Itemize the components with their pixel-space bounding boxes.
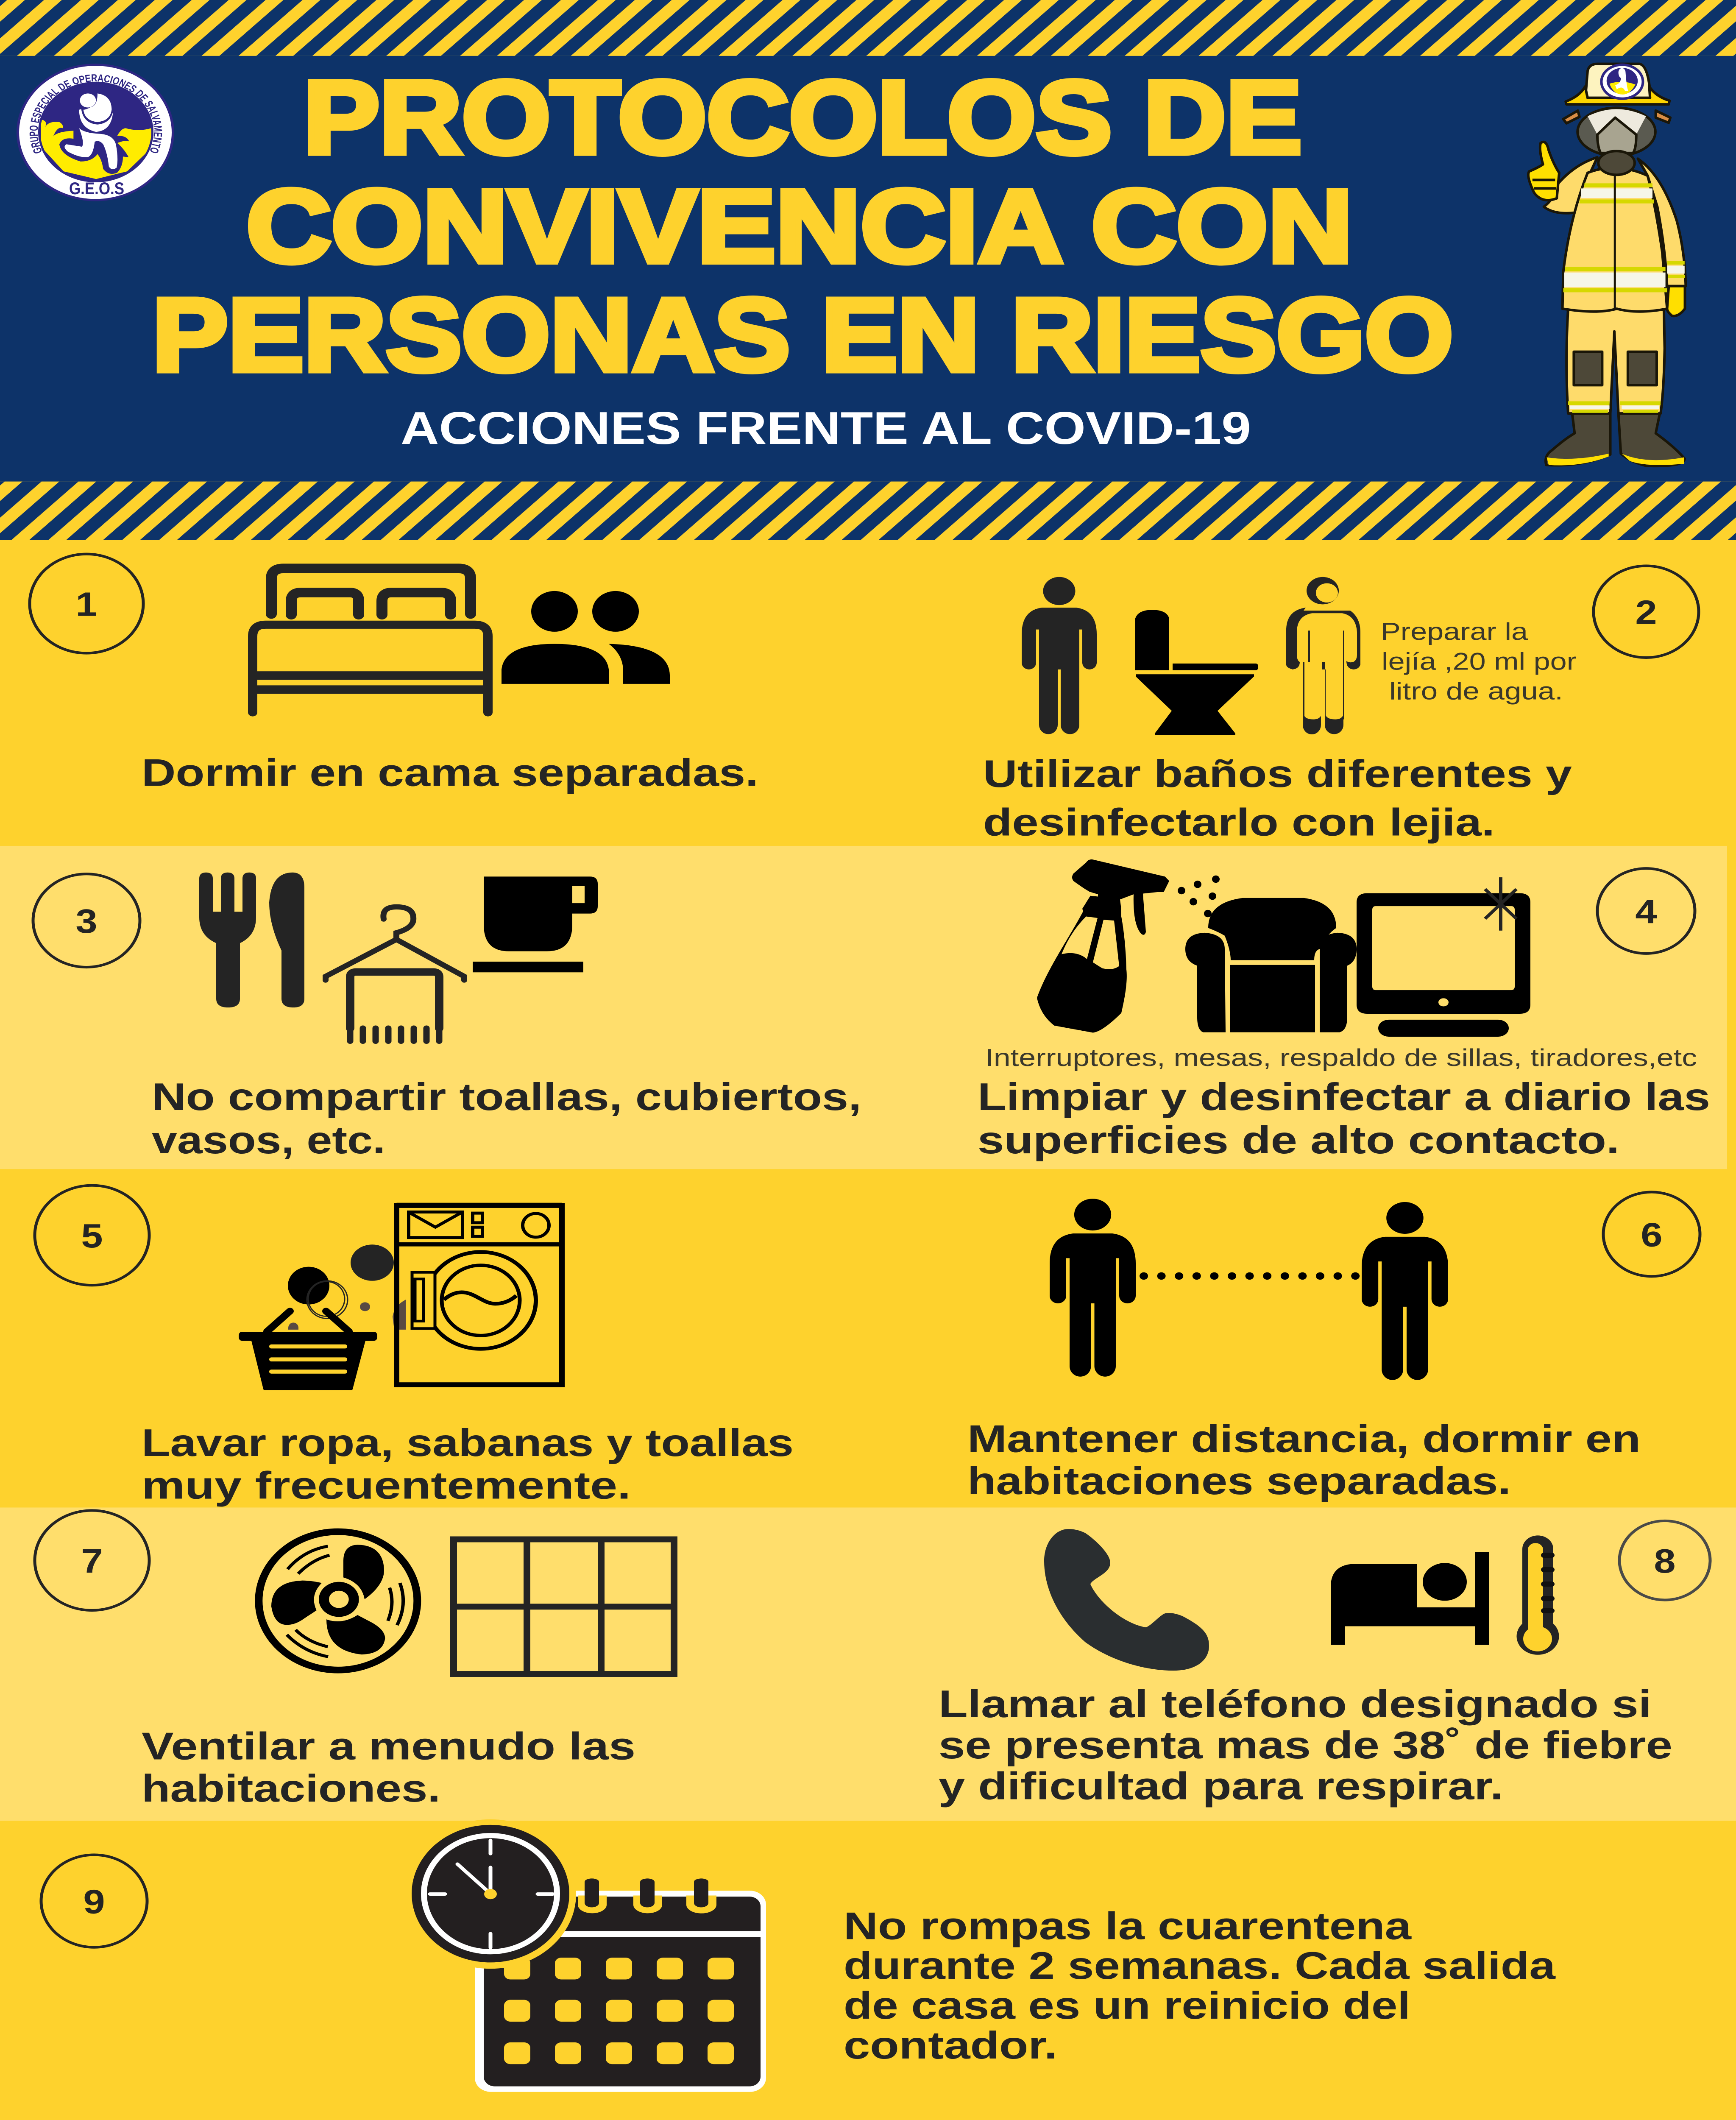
text	[152, 1075, 861, 1161]
text: contador.	[844, 2024, 1057, 2067]
subtitle: ACCIONES FRENTE AL COVID-19	[401, 402, 1251, 454]
text	[978, 1075, 1710, 1161]
title	[152, 59, 1453, 393]
text	[142, 1725, 635, 1810]
number 3	[33, 874, 140, 967]
icon: person right	[1362, 1202, 1448, 1380]
jacket	[1563, 168, 1667, 312]
step 9	[41, 1819, 1556, 2092]
icon: calendar	[475, 1878, 766, 2092]
text	[939, 1682, 1672, 1808]
icon: person in protective suit	[1286, 577, 1360, 734]
helmet	[1584, 64, 1651, 98]
icon: fan	[259, 1531, 417, 1670]
step 1	[30, 554, 758, 794]
bottom hazard stripes	[0, 482, 1736, 540]
number 1	[30, 554, 143, 653]
step 5	[35, 1186, 794, 1507]
helmet badge	[1601, 65, 1643, 99]
icon: monitor	[1357, 877, 1530, 1037]
number 4: 4	[1635, 893, 1657, 931]
number 5: 5	[81, 1217, 103, 1255]
text: Utilizar baños diferentes y	[983, 752, 1572, 795]
straps	[1563, 111, 1580, 123]
text: desinfectarlo con lejia.	[983, 801, 1495, 844]
step 7	[35, 1510, 674, 1810]
number 4	[1597, 868, 1695, 954]
text	[142, 1421, 794, 1507]
top hazard stripes	[0, 0, 1736, 56]
step 2	[983, 566, 1699, 844]
number 9: 9	[83, 1883, 105, 1921]
text: muy frecuentemente.	[142, 1464, 631, 1507]
title: PERSONAS EN RIESGO	[152, 277, 1453, 393]
number 2	[1594, 566, 1699, 658]
number 2: 2	[1635, 594, 1657, 631]
logo: G.E.O.S: G.E.O.S	[69, 179, 124, 198]
icon: two people	[502, 591, 670, 684]
icon: cup and saucer	[473, 876, 598, 972]
icon: spray bottle	[1037, 859, 1220, 1032]
right arm	[1638, 159, 1686, 286]
knee pads	[1574, 352, 1602, 385]
icon: fork	[199, 873, 256, 1007]
note: bleach preparation: Preparar la	[1381, 618, 1528, 645]
panel: row 7-8 background	[0, 1507, 1736, 1821]
text: habitaciones.	[142, 1767, 440, 1810]
title: CONVIVENCIA CON	[246, 168, 1353, 284]
binding rings	[578, 1878, 716, 1914]
panel: row 5-6 background	[0, 1169, 1736, 1507]
number 8: 8	[1654, 1542, 1676, 1580]
step 3	[33, 873, 861, 1161]
logo: G.E.O.S: GRUPO ESPECIAL DE OPERACIONES DE SALVAMENTO	[27, 72, 165, 155]
text: Limpiar y desinfectar a diario las	[978, 1075, 1710, 1118]
text: No compartir toallas, cubiertos,	[152, 1075, 861, 1118]
text: durante 2 semanas. Cada salida	[844, 1944, 1556, 1987]
logo: G.E.O.S	[17, 64, 174, 201]
note: bleach preparation: lejía ,20 ml por	[1382, 648, 1577, 675]
trousers	[1566, 309, 1665, 413]
note: bleach preparation: litro de agua.	[1389, 678, 1563, 705]
text: y dificultad para respirar.	[939, 1765, 1503, 1808]
icon: person in bed	[1331, 1552, 1489, 1645]
note: bleach preparation	[1381, 618, 1577, 705]
icon: person left	[1050, 1199, 1136, 1377]
right glove	[1667, 286, 1685, 316]
number 5	[35, 1186, 149, 1285]
icon: knife	[269, 873, 304, 1007]
panel: row 9 background	[0, 1821, 1736, 2120]
step 6	[967, 1192, 1700, 1503]
icon: clock	[405, 1819, 576, 1969]
respirator mask	[1577, 108, 1655, 156]
number 9	[41, 1855, 147, 1947]
text: se presenta mas de 38˚ de fiebre	[939, 1724, 1672, 1766]
raised arm	[1544, 157, 1597, 213]
icon: telephone	[1044, 1529, 1209, 1671]
icon: towel on hanger	[326, 907, 464, 1041]
icon: man	[1022, 577, 1097, 734]
ankle bands	[1568, 401, 1661, 413]
zipper	[1614, 174, 1616, 309]
text: Llamar al teléfono designado si	[939, 1682, 1652, 1726]
thumbs up glove	[1528, 142, 1559, 200]
number 1: 1	[75, 586, 98, 623]
panel: row 1-2 background	[0, 540, 1736, 846]
icon: armchair	[1185, 898, 1357, 1032]
number 6	[1603, 1192, 1700, 1276]
icon: thermometer	[1517, 1535, 1559, 1655]
number 7: 7	[81, 1542, 103, 1580]
note: high-contact surfaces: Interruptores, mesas, respaldo de sillas, tiradores,etc	[985, 1044, 1697, 1071]
reflective bands	[1563, 183, 1685, 292]
date cells	[504, 1958, 734, 2064]
text: No rompas la cuarentena	[844, 1905, 1412, 1947]
firefighter illustration	[1528, 64, 1686, 466]
icon: washing machine	[393, 1203, 562, 1385]
text: vasos, etc.	[152, 1119, 385, 1161]
text: habitaciones separadas.	[967, 1459, 1511, 1503]
panel: row 3-4 background	[0, 846, 1727, 1169]
number 8	[1619, 1521, 1710, 1600]
text	[967, 1417, 1641, 1503]
text: Dormir en cama separadas.	[142, 751, 758, 794]
number 7	[35, 1510, 149, 1610]
boots	[1546, 413, 1611, 465]
step 4	[978, 859, 1710, 1161]
header panel	[0, 0, 1736, 540]
text: superficies de alto contacto.	[978, 1119, 1619, 1161]
number 6: 6	[1641, 1216, 1663, 1254]
text: Lavar ropa, sabanas y toallas	[142, 1421, 794, 1464]
title: PROTOCOLOS DE	[304, 59, 1302, 175]
text	[844, 1905, 1556, 2067]
number 3: 3	[75, 902, 98, 940]
icon: toilet	[1135, 610, 1258, 735]
text: Ventilar a menudo las	[142, 1725, 635, 1768]
icon: dotted distance line	[1144, 1272, 1361, 1280]
text: de casa es un reinicio del	[844, 1984, 1410, 2027]
icon: bed	[250, 569, 490, 712]
text: Mantener distancia, dormir en	[967, 1417, 1641, 1460]
text	[983, 752, 1572, 844]
icon: window	[454, 1539, 674, 1674]
icon: laundry basket	[239, 1244, 394, 1390]
step 8	[939, 1521, 1710, 1808]
